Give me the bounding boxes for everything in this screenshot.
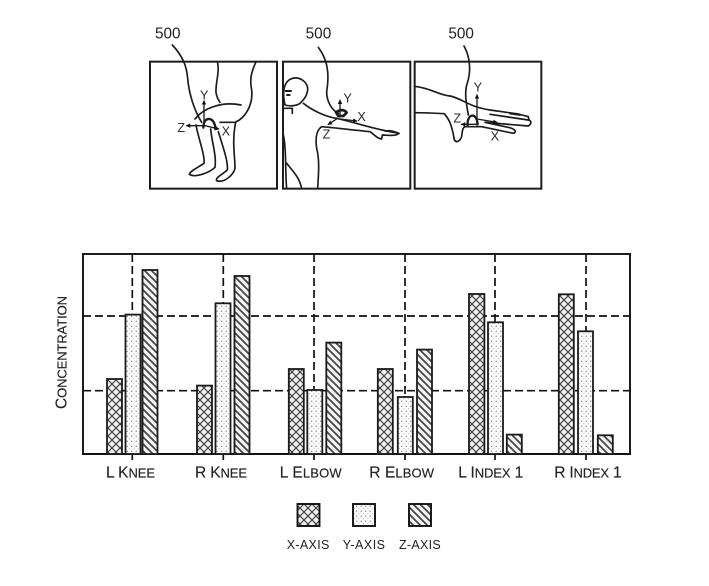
x-axis label: L Elbow: L ELBOW xyxy=(280,465,342,482)
x-axis label: R Index 1: R INDEX 1 xyxy=(554,465,622,482)
legend swatch: Z-axis xyxy=(409,504,431,526)
axis label: Y finger: Y xyxy=(474,81,483,95)
axis label: X: X xyxy=(222,125,231,139)
leader line and upper body drawing xyxy=(283,47,399,189)
axis label: Y: Y xyxy=(200,88,209,102)
legend swatch: Y-axis xyxy=(353,504,375,526)
bar chart xyxy=(83,254,630,460)
panel: index finger sensor figure xyxy=(415,25,541,189)
x-axis label: L Knee: L KNEE xyxy=(106,465,155,482)
axis label: Z finger: Z xyxy=(453,112,461,126)
bars: R Index 1 xyxy=(559,294,613,454)
axis label: X elbow: X xyxy=(357,110,366,124)
bars: R Knee xyxy=(197,276,250,454)
label: 500 elbow: 500 xyxy=(306,25,331,42)
legend swatch: X-axis xyxy=(298,504,320,526)
legend xyxy=(287,504,441,552)
bars: L Elbow xyxy=(289,343,341,454)
axis label: Y elbow: Y xyxy=(343,91,352,105)
leader line and legs drawing xyxy=(172,45,256,181)
bars: R Elbow xyxy=(378,350,432,454)
legend label: Y-axis: Y-AXIS xyxy=(343,538,385,552)
axis label: X finger: X xyxy=(491,130,500,144)
bars: L Index 1 xyxy=(469,294,522,454)
axis label: Z elbow: Z xyxy=(323,127,331,141)
y-axis title: CONCENTRATION xyxy=(54,296,70,409)
axis label: Z: Z xyxy=(177,121,185,135)
bars: L Knee xyxy=(107,270,158,454)
legend label: Z-axis: Z-AXIS xyxy=(399,538,441,552)
label: 500 finger: 500 xyxy=(448,25,474,42)
label: 500 knee: 500 xyxy=(155,25,181,42)
x-axis label: R Knee: R KNEE xyxy=(195,465,247,482)
x-axis label: R Elbow: R ELBOW xyxy=(369,465,435,482)
panel: elbow sensor figure xyxy=(283,25,410,189)
x-axis label: L Index 1: L INDEX 1 xyxy=(458,465,523,482)
leader line and hand drawing xyxy=(415,46,531,142)
panel: knee sensor figure xyxy=(150,25,277,189)
legend label: X-axis: X-AXIS xyxy=(287,538,329,552)
